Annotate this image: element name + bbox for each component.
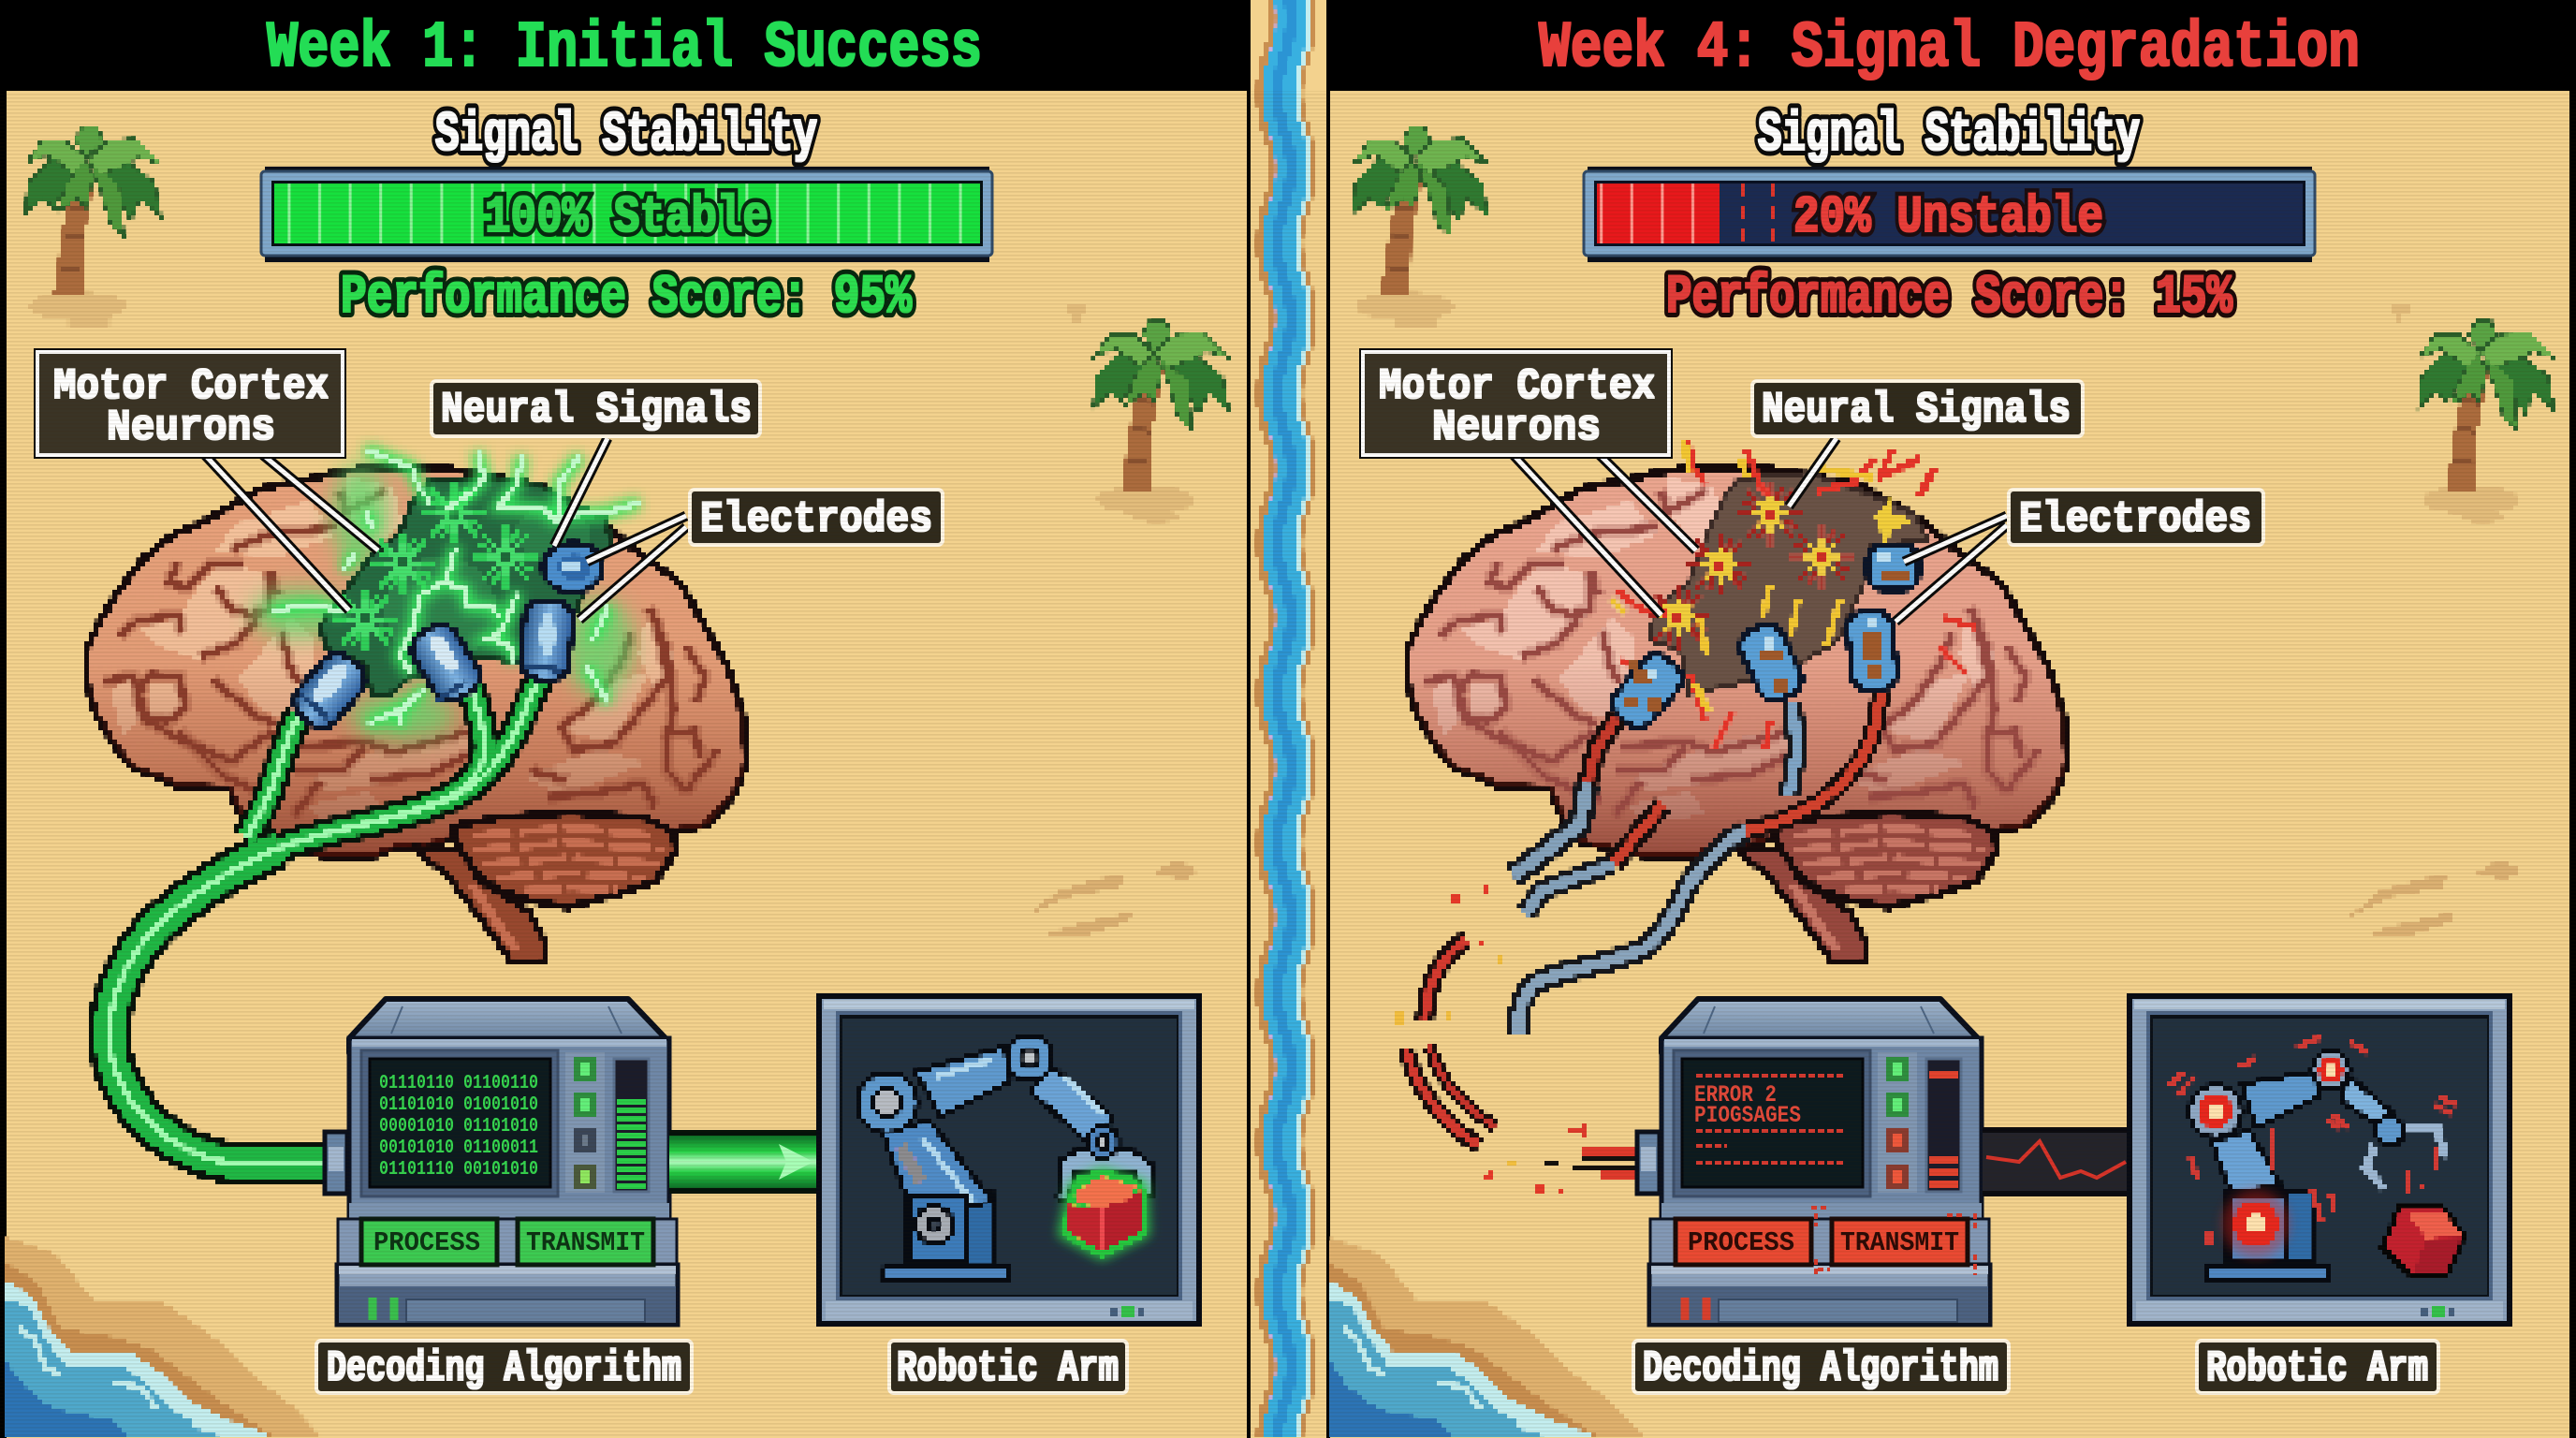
green output pipe with arrow (669, 1130, 819, 1194)
stability bar 100 percent (261, 167, 992, 262)
process button: PROCESS (373, 1227, 480, 1258)
vibration marks (2170, 1037, 2457, 1245)
robotic arm monitor right (2130, 996, 2510, 1324)
panel: week 1 (6, 12, 1247, 1438)
transmit button right (1832, 1219, 1968, 1265)
performance score 15: Performance Score: 15% (1666, 268, 2232, 329)
decoding computer left (325, 999, 678, 1325)
label: motor cortex neurons left: Neurons (107, 404, 275, 452)
palm tree left 1 (25, 126, 161, 329)
label: motor cortex neurons right (1359, 348, 1673, 459)
week 4 title: Week 4: Signal Degradation (1539, 12, 2360, 86)
degraded cables (1406, 690, 1881, 1145)
week 1 title: Week 1: Initial Success (267, 12, 982, 86)
corroded electrodes right (1606, 545, 1919, 734)
binary readout: 01101010 01001010 (379, 1094, 538, 1116)
severed wire stubs and sparks (1397, 886, 1638, 1193)
error readout (1694, 1076, 1844, 1163)
healthy brain illustration (87, 449, 746, 962)
robotic arm monitor left (819, 996, 1199, 1324)
decoding computer right (1637, 999, 1990, 1325)
label: robotic arm right: Robotic Arm (2206, 1344, 2428, 1393)
stability value: 100% Stable (485, 187, 768, 247)
malfunctioning robotic arm (2189, 1051, 2446, 1281)
binary readout: 01101110 00101010 (379, 1159, 538, 1181)
red fault lights (2199, 1058, 2343, 1257)
process button (361, 1219, 497, 1265)
label: decoding algorithm right: Decoding Algorithm (1643, 1344, 1998, 1393)
label: motor cortex neurons right: Motor Cortex (1379, 362, 1655, 411)
beach corner right (1329, 1238, 1647, 1438)
palm tree right 1 (1353, 126, 1488, 329)
center river divider (1247, 0, 1330, 1438)
dropped red cube (2382, 1208, 2465, 1276)
label: decoding algorithm left: Decoding Algorithm (327, 1344, 681, 1393)
robotic arm (857, 1035, 1151, 1282)
leader lines left (205, 438, 686, 620)
label: electrodes right: Electrodes (2019, 495, 2251, 544)
label: electrodes left: Electrodes (700, 495, 932, 544)
dead output pipe with flatline signal (1983, 1127, 2128, 1196)
binary readout: 00001010 01101010 (379, 1116, 538, 1137)
green cables (110, 667, 545, 1164)
signal stability heading right: Signal Stability (1758, 104, 2140, 168)
label: motor cortex neurons right: Neurons (1432, 404, 1601, 452)
status leds (574, 1057, 596, 1189)
label: robotic arm left: Robotic Arm (897, 1344, 1119, 1393)
indicator lights (373, 1298, 394, 1320)
damaged brain illustration (1408, 440, 2067, 962)
panel: week 4 (1329, 12, 2569, 1438)
process button right: PROCESS (1688, 1227, 1794, 1258)
electrodes left (286, 543, 603, 735)
label: neural signals left: Neural Signals (441, 386, 752, 434)
transmit button right: TRANSMIT (1840, 1227, 1959, 1258)
label: neural signals right: Neural Signals (1762, 386, 2071, 434)
stability bar 20 percent (1584, 167, 2315, 262)
beach corner left (6, 1238, 323, 1438)
stability value right: 20% Unstable (1793, 187, 2103, 247)
sand background right (1330, 91, 2569, 1438)
leader lines right (1514, 438, 2007, 622)
sand background left (7, 91, 1247, 1438)
indicator lights right (1685, 1298, 1706, 1320)
palm tree left 2 (1093, 320, 1229, 522)
label: motor cortex neurons left (34, 348, 346, 459)
palm tree right 2 (2419, 320, 2554, 522)
held red cube (1058, 1167, 1149, 1260)
transmit button (518, 1219, 653, 1265)
signal stability heading: Signal Stability (435, 104, 817, 168)
signal level meter (617, 1102, 646, 1186)
error readout: PIOGSAGES (1694, 1102, 1801, 1129)
performance score 95: Performance Score: 95% (341, 268, 912, 329)
binary readout: 01110110 01100110 (379, 1073, 538, 1094)
status leds right (1886, 1057, 1909, 1189)
error readout: ERROR 2 (1694, 1081, 1777, 1108)
sand streaks left (1027, 305, 1199, 938)
binary readout: 00101010 01100011 (379, 1137, 538, 1159)
sand streaks right (2349, 305, 2522, 938)
process button right (1676, 1219, 1811, 1265)
binary readout (379, 1073, 538, 1181)
signal level meter right (1929, 1075, 1958, 1184)
transmit button: TRANSMIT (526, 1227, 645, 1258)
label: motor cortex neurons left: Motor Cortex (53, 362, 329, 411)
